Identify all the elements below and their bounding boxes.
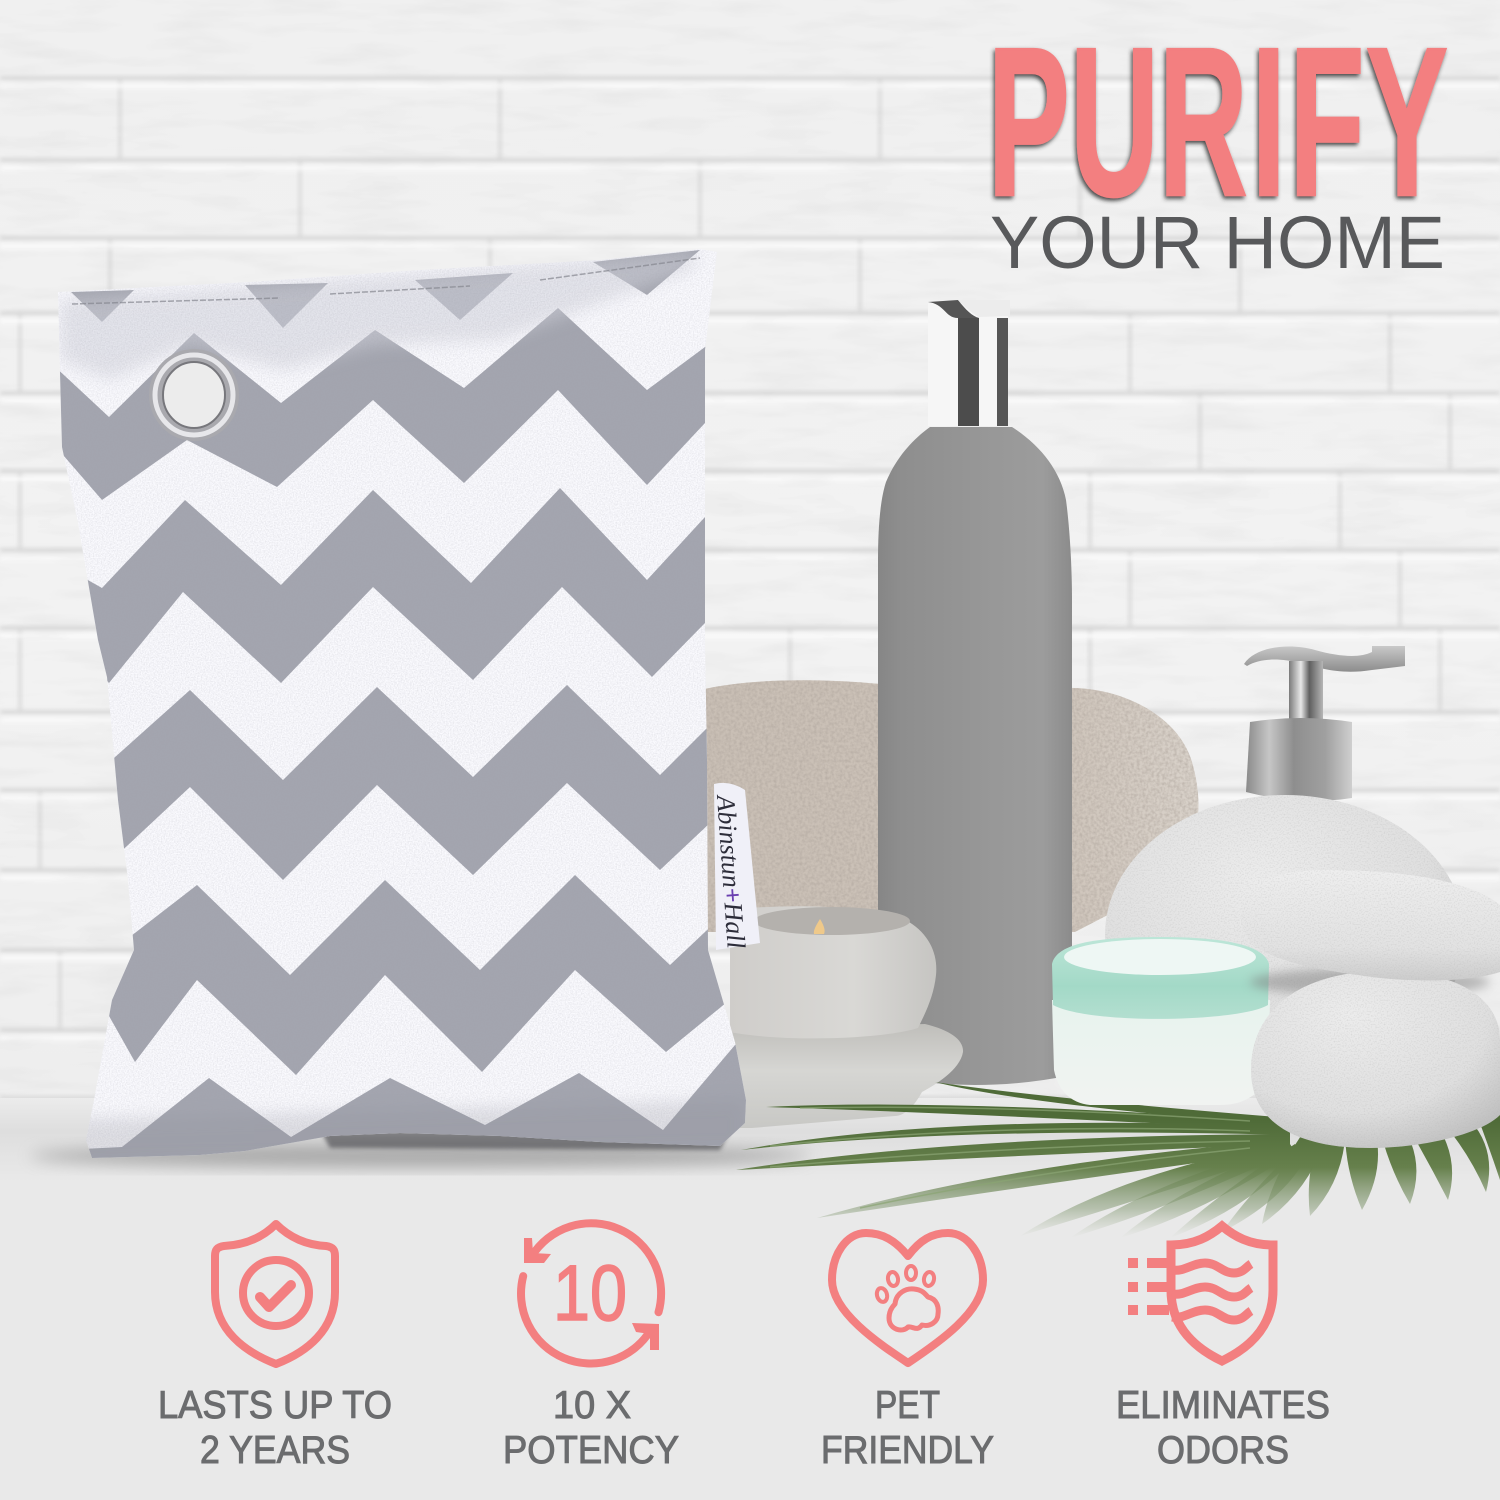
sewn fabric tag: Abinstun+Hall <box>711 792 751 950</box>
label: potency: POTENCY <box>503 1429 679 1472</box>
icon: shield with check <box>215 1224 335 1364</box>
icon: ten with circular arrows <box>521 1223 661 1363</box>
pouch stitched hem <box>72 258 700 304</box>
label: 10 X <box>553 1384 631 1427</box>
label: PET <box>875 1384 940 1427</box>
label: odors: ODORS <box>1157 1429 1289 1472</box>
candle base <box>720 1024 963 1128</box>
towel <box>700 676 1210 936</box>
metal eyelet <box>149 349 239 441</box>
candle in stone bowl <box>720 906 963 1128</box>
label: LASTS UP TO <box>158 1384 392 1427</box>
background: floor and bottom panel <box>0 1098 1500 1500</box>
feature: lasts up to 2 years <box>158 1224 392 1427</box>
stone speckle <box>1240 868 1500 1150</box>
chevron stripes <box>50 250 770 1180</box>
candle bowl <box>730 906 936 1038</box>
bottle <box>878 300 1072 1085</box>
bottle cap <box>928 300 1010 426</box>
candle rim <box>754 907 910 935</box>
feature: pet friendly <box>832 1233 983 1427</box>
jar base <box>1052 1000 1270 1105</box>
candle flame <box>814 919 825 934</box>
jar lid top <box>1064 939 1256 975</box>
dispenser pump head <box>1244 646 1405 672</box>
pouch fabric <box>40 240 770 1180</box>
dispenser stone body <box>1105 795 1456 1014</box>
icon: heart with paw <box>832 1233 983 1363</box>
title <box>988 3 1448 284</box>
stacked stones <box>1240 868 1500 1150</box>
dispenser collar <box>1246 718 1352 801</box>
title: YOUR HOME: YOUR HOME <box>990 201 1445 284</box>
stone contact shadow <box>1250 968 1490 996</box>
feature: eliminates odors <box>1116 1226 1330 1427</box>
label: friendly: FRIENDLY <box>821 1429 994 1472</box>
icon: ten with circular arrows: 10 <box>553 1248 627 1337</box>
fold shading <box>60 252 700 380</box>
jar mint lid <box>1052 937 1269 1019</box>
palm leaves <box>736 1082 1500 1238</box>
label: ELIMINATES <box>1116 1384 1330 1427</box>
background: white brick wall <box>0 0 1500 1110</box>
feature: 10x potency <box>521 1223 661 1427</box>
dispenser stem <box>1289 661 1323 721</box>
title: PURIFY: PURIFY <box>988 3 1448 240</box>
bottle body <box>878 427 1072 1085</box>
soap dispenser <box>1105 646 1456 1014</box>
product: chevron pouch <box>40 240 770 1180</box>
label: 2 years: 2 YEARS <box>200 1429 350 1472</box>
flat stone <box>1241 870 1500 980</box>
lower stone <box>1251 971 1500 1148</box>
icon: shield with waves <box>1128 1226 1273 1361</box>
cosmetic jar <box>1052 937 1270 1105</box>
